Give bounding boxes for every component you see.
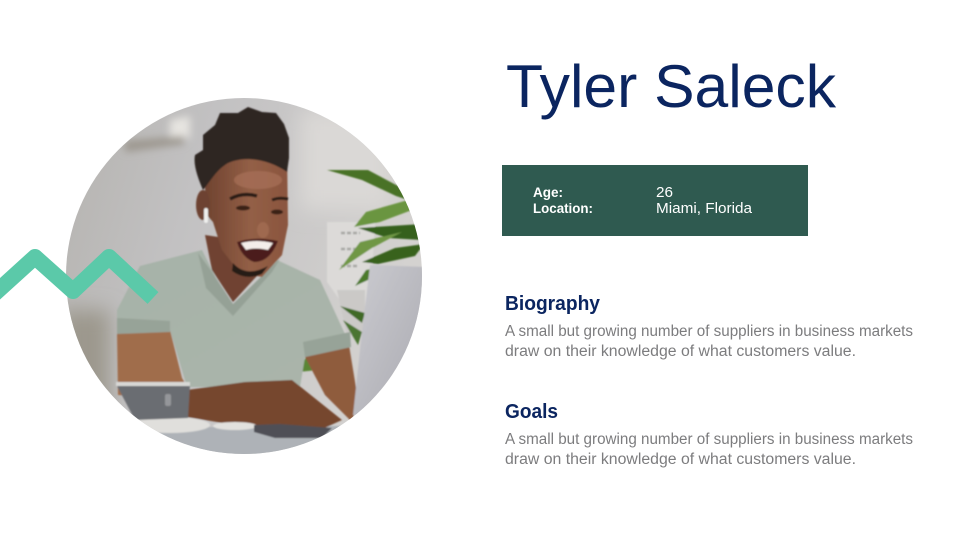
hand	[187, 380, 342, 430]
left arm	[116, 330, 185, 396]
shirt	[117, 250, 351, 387]
value: location: Miami, Florida	[656, 200, 753, 217]
coffee cup	[116, 384, 190, 420]
text block: biography	[505, 323, 913, 360]
text block: biography: A small but growing number of suppliers in business markets	[505, 323, 913, 340]
mouth and beard	[237, 239, 278, 262]
value: age: 26	[656, 184, 673, 201]
right arm	[305, 345, 358, 422]
plant leaves	[298, 170, 424, 372]
head	[205, 150, 288, 277]
text block: goals: draw on their knowledge of what customers value.	[505, 451, 856, 468]
neck	[204, 234, 258, 302]
table	[60, 425, 430, 460]
label: age: Age:	[533, 184, 563, 200]
text block: biography: draw on their knowledge of what customers value.	[505, 343, 856, 360]
heading: goals: Goals	[505, 401, 558, 423]
text block: goals	[505, 431, 913, 468]
heading: biography: Biography	[505, 293, 601, 315]
brows and eyes	[230, 195, 257, 199]
photo: man at laptop in circle	[60, 90, 430, 460]
hair	[195, 107, 289, 190]
saucer	[130, 417, 210, 433]
text block: goals: A small but growing number of suppliers in business markets	[505, 431, 913, 448]
title: Tyler Saleck	[506, 53, 837, 120]
label: location: Location:	[533, 200, 593, 216]
plate	[213, 422, 257, 430]
poster	[327, 222, 376, 296]
zigzag accent line	[0, 257, 153, 298]
laptop	[353, 265, 425, 420]
panel: age and location	[502, 165, 808, 236]
phone and keyboard	[254, 424, 332, 438]
